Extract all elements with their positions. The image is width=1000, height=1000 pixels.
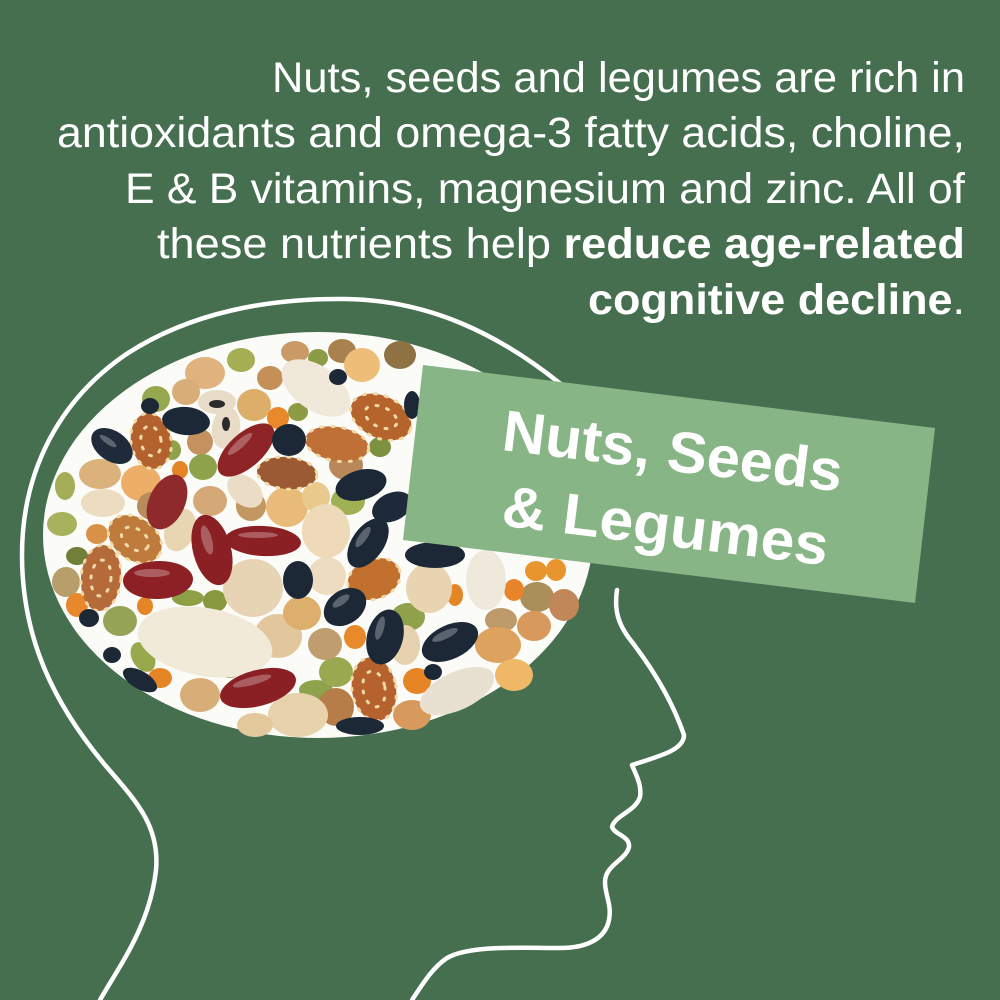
- black beans: [79, 369, 484, 735]
- label title: & Legumes: [499, 474, 832, 578]
- intro text: [57, 54, 966, 324]
- label panel: [403, 365, 935, 603]
- intro text: antioxidants and omega-3 fatty acids, choline,: [57, 109, 965, 157]
- green and orange lentils: [47, 339, 579, 730]
- dark red kidney beans: [122, 414, 302, 715]
- intro text: cognitive decline .: [588, 276, 965, 324]
- intro text: E & B vitamins, magnesium and zinc. All of: [125, 165, 966, 213]
- label title: Nuts, Seeds: [499, 398, 846, 504]
- intro text: Nuts, seeds and legumes are rich in: [272, 54, 965, 102]
- head outline: [22, 299, 684, 1000]
- label title: [490, 398, 846, 579]
- bean highlights: [98, 430, 459, 690]
- intro text: these nutrients help reduce age-related: [157, 220, 965, 268]
- legume photo in brain: [43, 332, 593, 738]
- speckled pinto beans: [78, 384, 419, 724]
- white beans: [132, 348, 506, 737]
